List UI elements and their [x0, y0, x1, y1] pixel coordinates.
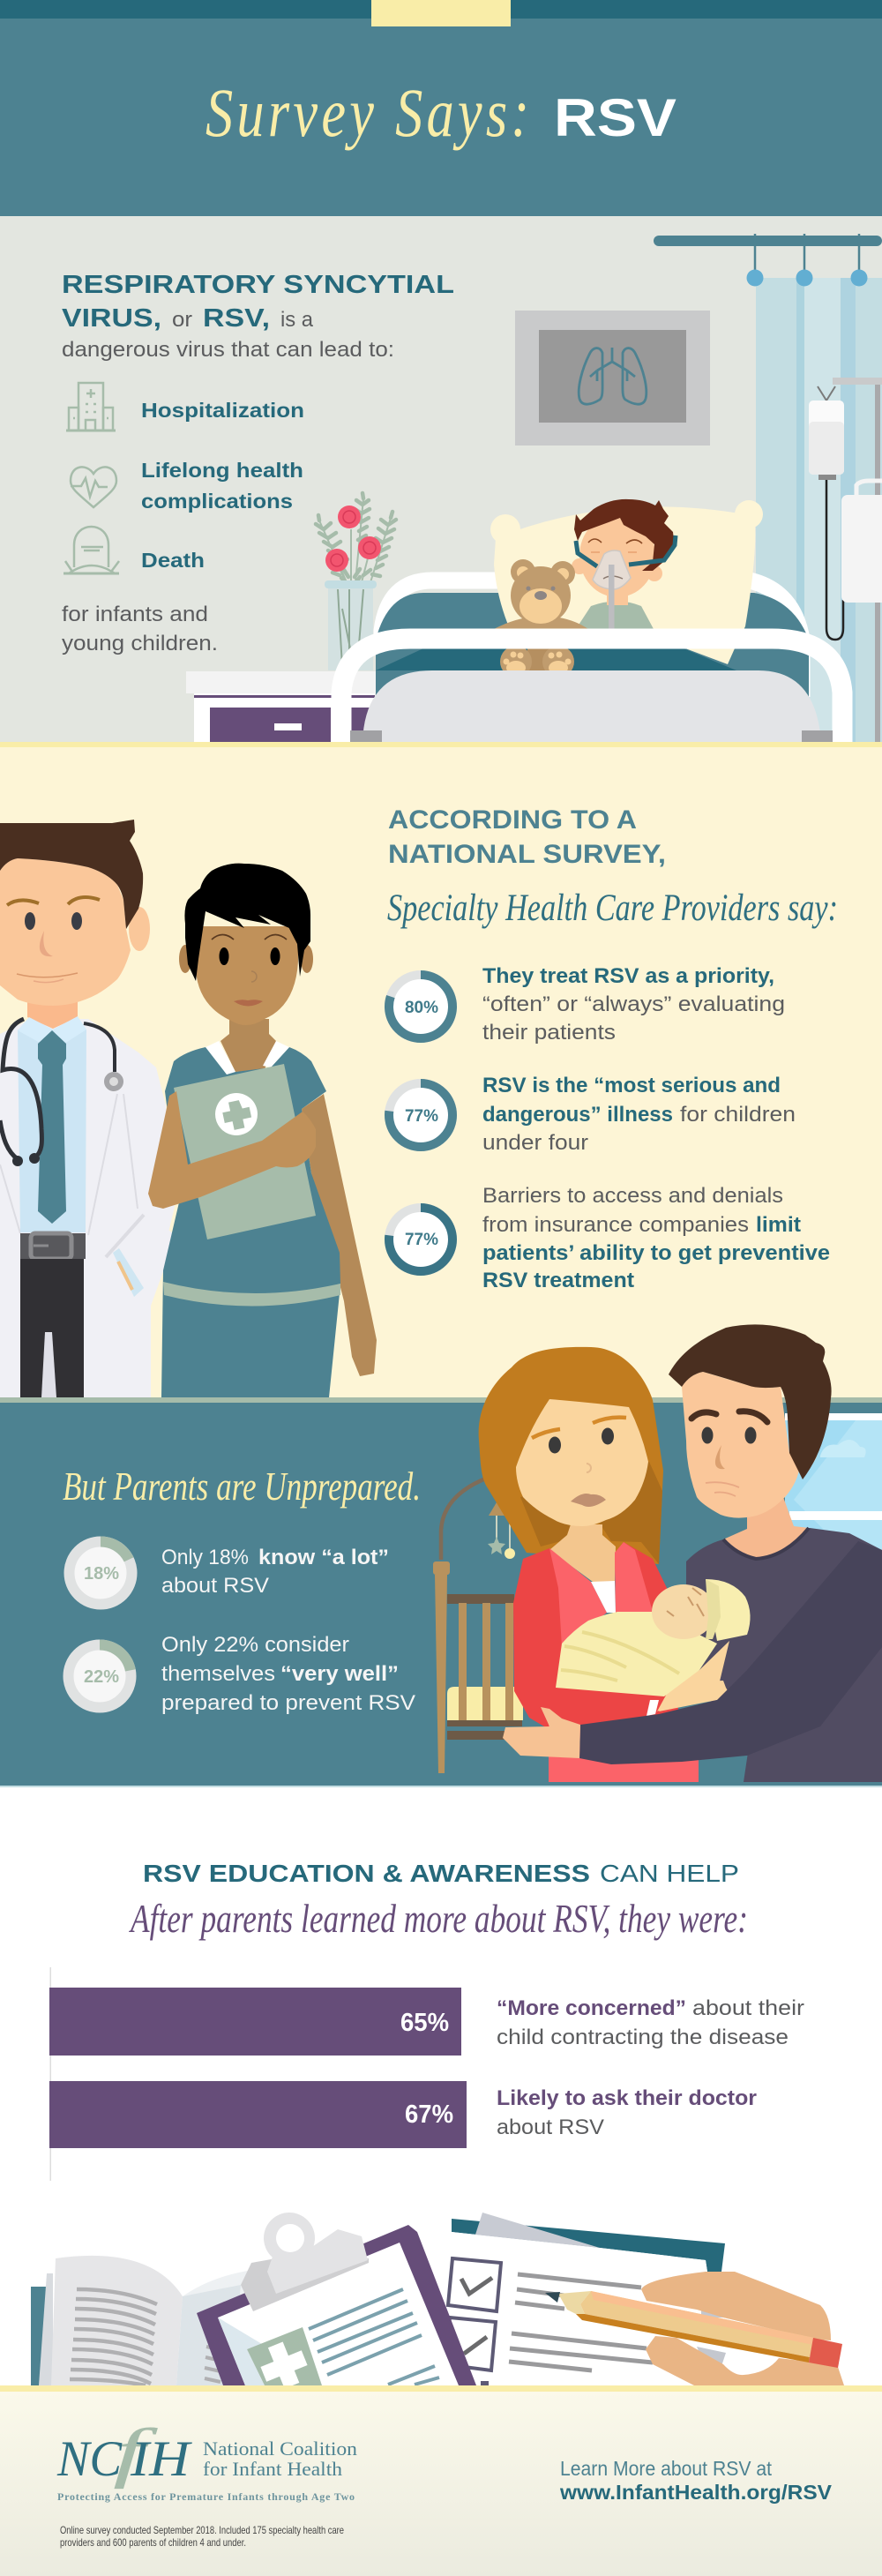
stat: 18 percent: Only 18% — [161, 1546, 249, 1569]
donut chart: 77% barriers — [389, 1208, 452, 1271]
panel: national survey providers — [0, 742, 882, 1399]
panel: parents unprepared — [0, 1324, 882, 1787]
heading: but parents are unprepared: But Parents are Unprepared. — [63, 1464, 421, 1509]
heading: respiratory syncytial virus — [62, 271, 454, 362]
text: for infants and young children — [62, 603, 218, 655]
stat: 80 percent: They treat RSV as a priority, — [482, 964, 774, 988]
IV stand and bags — [809, 378, 882, 742]
logo: NCfIH: IH — [130, 2431, 192, 2487]
illustration: checklist paper — [444, 2213, 728, 2385]
stat: 80 percent: “often” or “always” evaluating — [482, 992, 785, 1016]
illustration: mother — [479, 1347, 699, 1782]
text: likely to ask their doctor: Likely to ask their doctor — [497, 2086, 757, 2110]
text: likely to ask their doctor: about RSV — [497, 2115, 604, 2139]
heading: according to a national survey — [388, 805, 666, 869]
stat: 77 percent barriers: patients’ ability to get preventive — [482, 1241, 830, 1265]
title — [206, 76, 676, 152]
text: for infants and young children: young children. — [62, 632, 218, 655]
heading: RSV education and awareness can help — [143, 1860, 739, 1887]
bar: 65%: 65% — [400, 2009, 449, 2037]
panel: footer — [0, 2385, 882, 2576]
stat: 22 percent: Only 22% consider — [161, 1633, 349, 1657]
bar: 65% — [49, 1988, 461, 2056]
stat: 77 percent barriers: Barriers to access and denials — [482, 1184, 783, 1208]
heading: respiratory syncytial virus: VIRUS, — [62, 304, 161, 333]
stat: 80 percent: their patients — [482, 1021, 616, 1045]
logo: NCfIH: NC — [56, 2431, 123, 2487]
stat: 77 percent barriers: RSV treatment — [482, 1269, 634, 1292]
nightstand — [186, 671, 376, 742]
stat: 77 percent barriers: from insurance companies — [482, 1213, 749, 1237]
icon: gravestone — [64, 527, 119, 573]
title: RSV — [554, 88, 676, 147]
text: more concerned — [497, 1996, 804, 2049]
logo: NCfIH: National Coalition — [203, 2437, 357, 2460]
stat: 77 percent most serious: for children — [680, 1103, 796, 1127]
illustration: clipboard — [197, 2213, 476, 2394]
logo: NCfIH: f — [113, 2415, 158, 2490]
illustration: hand with pencil — [545, 2272, 844, 2385]
call to action: Learn More about RSV at — [560, 2457, 773, 2480]
stat: 77 percent barriers: limit — [756, 1213, 801, 1237]
footnote — [60, 2524, 344, 2549]
child — [572, 499, 676, 629]
donut chart: 80% — [389, 975, 452, 1038]
stat: 77 percent most serious: RSV is the “most serious and — [482, 1074, 781, 1097]
x-ray with lungs — [515, 311, 710, 446]
bar: 67% — [49, 2081, 467, 2148]
donut chart: 80%: 80% — [405, 999, 438, 1017]
teddy bear — [494, 559, 588, 629]
footnote: Online survey conducted September 2018. Included 175 specialty health care — [60, 2524, 344, 2536]
bed sheet — [376, 646, 809, 697]
flowers in vase — [316, 493, 396, 670]
heading: respiratory syncytial virus: is a — [280, 308, 314, 332]
logo: NCfIH — [56, 2415, 357, 2503]
stat: 18 percent: know “a lot” — [258, 1546, 389, 1569]
donut chart: 77% — [389, 1083, 452, 1147]
text: more concerned: “More concerned” — [497, 1996, 686, 2020]
icon: heart with pulse — [71, 467, 116, 507]
text: likely to ask their doctor — [497, 2086, 757, 2139]
heading: respiratory syncytial virus: RESPIRATORY SYNCYTIAL — [62, 271, 454, 299]
illustration: doctor — [0, 820, 176, 1397]
heading: respiratory syncytial virus: or — [172, 308, 192, 332]
illustration: father body — [686, 1497, 882, 1782]
bar chart — [49, 1967, 467, 2181]
label: lifelong health complications: Lifelong health — [141, 459, 303, 482]
heading: according to a national survey: ACCORDING TO A — [388, 805, 637, 835]
illustration: nurse — [148, 864, 377, 1397]
stat: 22 percent: prepared to prevent RSV — [161, 1691, 415, 1715]
illustration: open book — [31, 2256, 256, 2385]
stat: 77 percent most serious — [389, 1074, 796, 1155]
footnote: providers and 600 parents of children 4 and under. — [60, 2536, 246, 2549]
illustration: father's arm around family — [503, 1541, 882, 1764]
donut chart: 18% — [69, 1542, 132, 1604]
heading: RSV education and awareness can help: CAN HELP — [600, 1860, 739, 1887]
logo: NCfIH: for Infant Health — [203, 2458, 342, 2480]
heading: respiratory syncytial virus: dangerous virus that can lead to: — [62, 338, 394, 362]
illustration: baby — [556, 1579, 751, 1716]
call to action — [559, 2457, 833, 2504]
label: death: Death — [141, 549, 205, 572]
donut chart: 77% barriers: 77% — [405, 1231, 438, 1249]
heading: RSV education and awareness can help: RSV EDUCATION & AWARENESS — [143, 1860, 590, 1887]
donut chart: 77%: 77% — [405, 1107, 438, 1126]
label: lifelong health complications: complications — [141, 490, 293, 513]
label: hospitalization: Hospitalization — [141, 399, 304, 422]
donut chart: 22%: 22% — [84, 1667, 119, 1687]
stat: 77 percent barriers — [389, 1184, 830, 1292]
stat: 77 percent most serious: dangerous” illness — [482, 1103, 673, 1127]
pillow — [490, 500, 763, 666]
panel: header — [0, 0, 882, 216]
icon: hospital — [66, 383, 116, 431]
stat: 22 percent: “very well” — [280, 1662, 399, 1686]
hospital bed with child and teddy bear — [341, 499, 842, 742]
bed footboard — [341, 639, 842, 742]
donut chart: 22% — [69, 1644, 131, 1708]
heading: according to a national survey: NATIONAL SURVEY, — [388, 840, 666, 869]
stat: 18 percent — [69, 1542, 389, 1604]
illustration: window — [785, 1413, 882, 1554]
panel: education and awareness — [0, 1787, 882, 2394]
logo: NCfIH: Protecting Access for Premature Infants through Age Two — [57, 2490, 355, 2503]
illustration: crib and mobile — [433, 1478, 523, 1773]
text: more concerned: about their — [692, 1996, 804, 2020]
stat: 80 percent — [389, 964, 785, 1045]
heading: respiratory syncytial virus: RSV, — [203, 304, 270, 333]
title: Survey Says: — [206, 76, 529, 152]
stat: 22 percent — [69, 1633, 415, 1715]
stat: 18 percent: about RSV — [161, 1574, 269, 1598]
stat: 22 percent: themselves — [161, 1662, 275, 1686]
label: lifelong health complications — [141, 459, 303, 513]
hospital curtain and rod — [654, 234, 882, 742]
text: for infants and young children: for infants and — [62, 603, 208, 626]
bed blanket — [363, 670, 821, 742]
stat: 77 percent most serious: under four — [482, 1131, 588, 1155]
donut chart: 18%: 18% — [84, 1564, 119, 1584]
text: more concerned: child contracting the disease — [497, 2026, 789, 2049]
illustration: father head — [669, 1324, 832, 1518]
bar: 67%: 67% — [405, 2100, 453, 2129]
panel: what is RSV — [0, 216, 882, 742]
call to action: www.InfantHealth.org/RSV — [559, 2481, 833, 2504]
